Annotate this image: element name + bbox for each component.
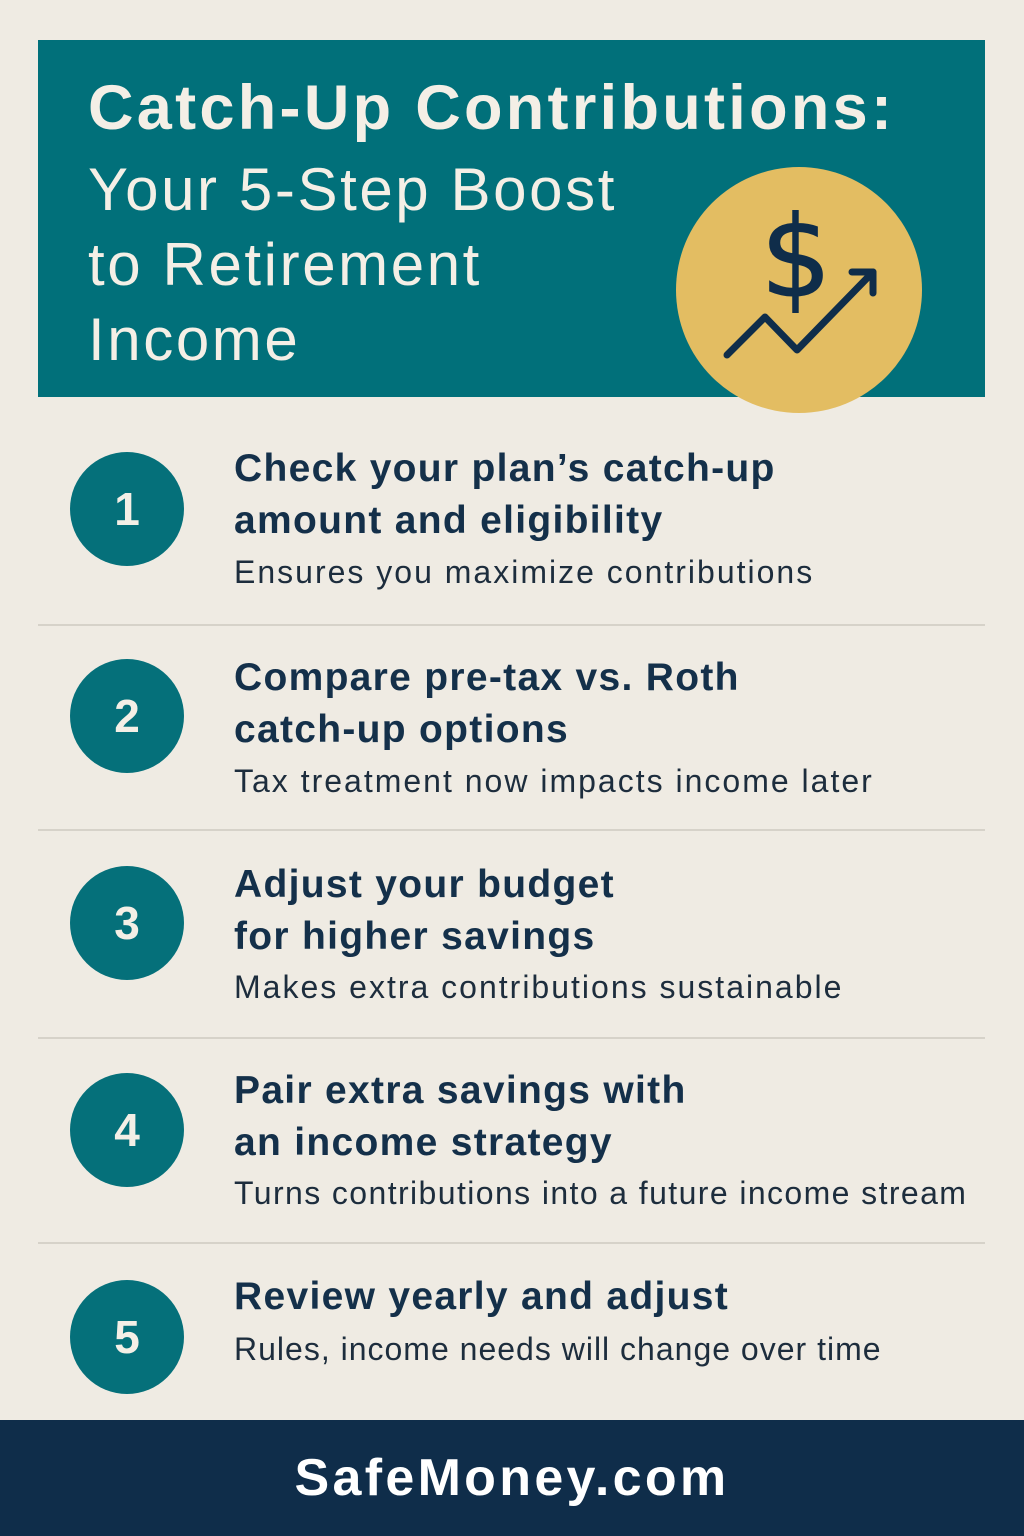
number 4 xyxy=(70,1073,184,1187)
number 3: 3 xyxy=(114,897,140,949)
subtitle: Your 5-Step Boost xyxy=(88,156,617,223)
step 5 text: Rules, income needs will change over time xyxy=(234,1331,882,1367)
number 1 xyxy=(70,452,184,566)
footer: SafeMoney.com xyxy=(295,1449,729,1507)
subtitle: Income xyxy=(88,306,300,373)
step 3 title: Adjust your budget xyxy=(234,863,615,906)
step 3 text: Makes extra contributions sustainable xyxy=(234,969,843,1005)
step 1 title: amount and eligibility xyxy=(234,499,663,542)
number 3 xyxy=(70,866,184,980)
step 2 text: Tax treatment now impacts income later xyxy=(234,763,874,799)
step 4 title: Pair extra savings with xyxy=(234,1069,687,1112)
number 1: 1 xyxy=(114,483,140,535)
step 2 title xyxy=(234,656,740,751)
header panel xyxy=(38,40,985,397)
subtitle: to Retirement xyxy=(88,231,482,298)
number 5: 5 xyxy=(114,1311,140,1363)
step 5 title: Review yearly and adjust xyxy=(234,1275,729,1318)
footer xyxy=(0,1420,1024,1536)
subtitle xyxy=(88,156,617,373)
step 4 title: an income strategy xyxy=(234,1121,613,1164)
step 4 xyxy=(70,1069,967,1211)
step 4 title xyxy=(234,1069,687,1164)
icon: dollar with rising arrow: $ xyxy=(760,193,832,323)
step 2 xyxy=(70,656,874,799)
step 3 title xyxy=(234,863,615,958)
step 2 title: Compare pre-tax vs. Roth xyxy=(234,656,740,699)
step 5 xyxy=(70,1275,882,1394)
icon: dollar with rising arrow xyxy=(676,167,922,413)
step 2 title: catch-up options xyxy=(234,708,569,751)
number 2: 2 xyxy=(114,690,140,742)
number 2 xyxy=(70,659,184,773)
step 3 xyxy=(70,863,843,1005)
step 1 text: Ensures you maximize contributions xyxy=(234,554,814,590)
step 3 title: for higher savings xyxy=(234,915,595,958)
step 4 text: Turns contributions into a future income stream xyxy=(234,1175,967,1211)
step 1 title xyxy=(234,447,776,542)
title: Catch-Up Contributions: xyxy=(88,73,895,143)
step 1 title: Check your plan’s catch-up xyxy=(234,447,776,490)
number 4: 4 xyxy=(114,1104,140,1156)
step 1 xyxy=(70,447,814,590)
number 5 xyxy=(70,1280,184,1394)
